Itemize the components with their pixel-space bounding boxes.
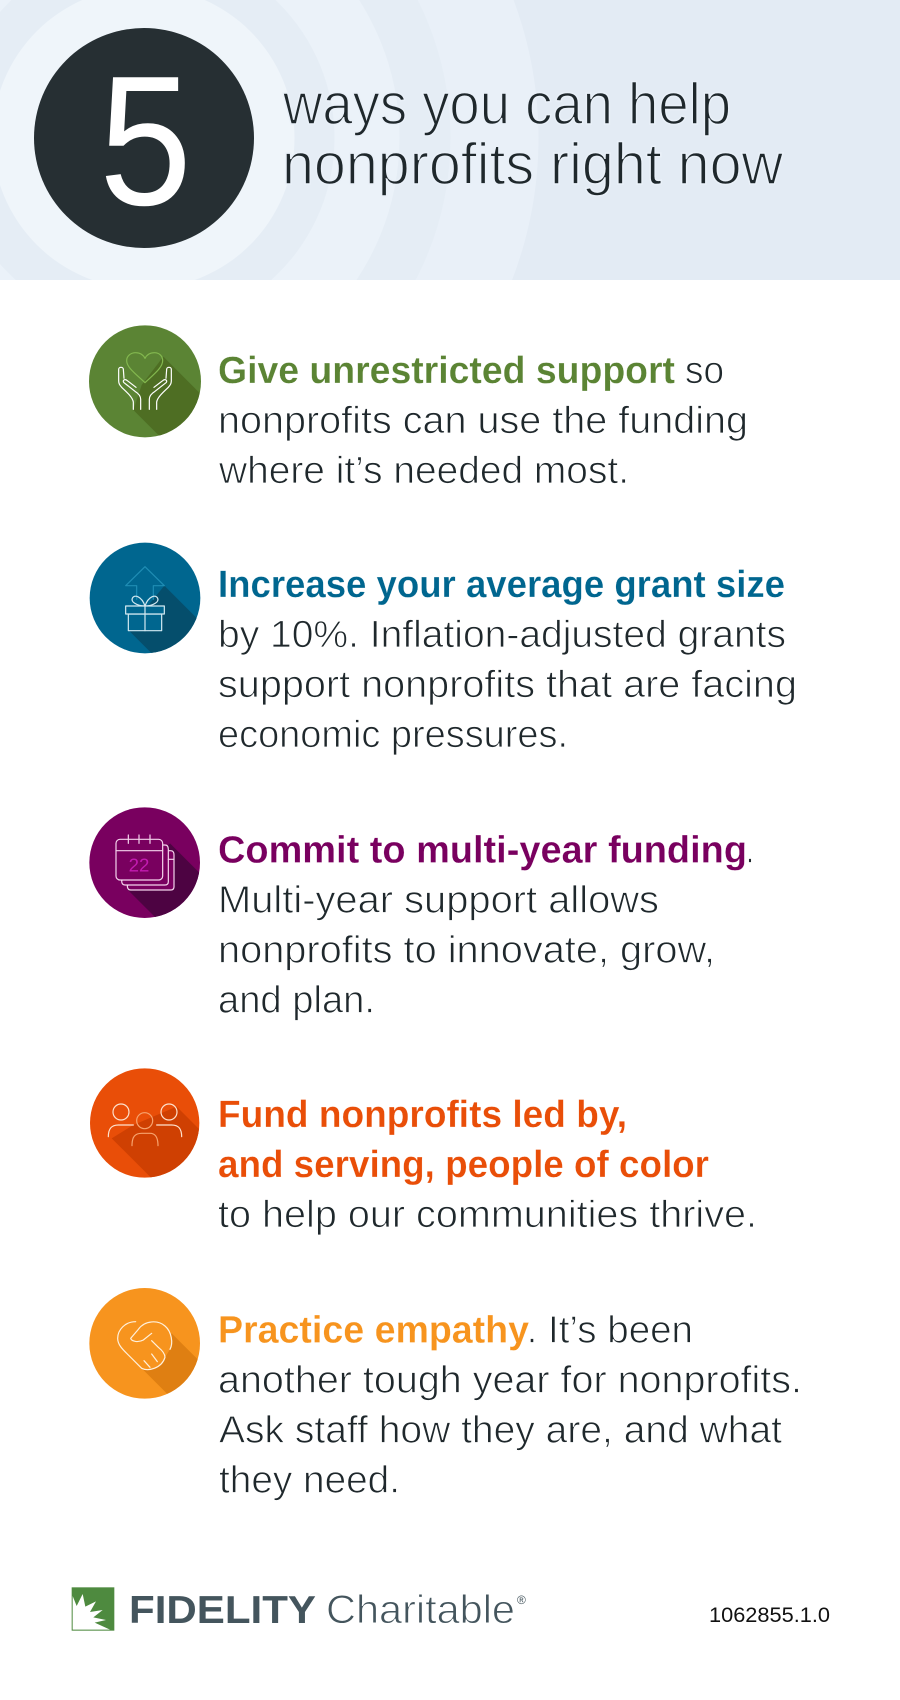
header banner xyxy=(0,0,900,280)
text block 1: Give unrestricted support xyxy=(218,350,675,392)
text block 3: . xyxy=(746,830,754,872)
text block 2: Increase your average grant size xyxy=(218,564,785,606)
text block 4: to help our communities thrive. xyxy=(218,1194,757,1236)
text block 1: nonprofits can use the funding xyxy=(218,400,748,442)
item 2: grant size xyxy=(90,543,797,756)
text block 3: and plan. xyxy=(218,980,375,1022)
logo: Fidelity Charitable xyxy=(72,1587,526,1632)
text block 1: so xyxy=(685,350,724,392)
text block 2 xyxy=(218,564,797,756)
icon: calendar stack xyxy=(89,807,200,918)
reference code: 1062855.1.0 xyxy=(709,1604,830,1627)
title xyxy=(282,72,784,197)
text block 2: support nonprofits that are facing xyxy=(218,664,797,706)
number badge xyxy=(34,28,254,248)
text block 5: Ask staff how they are, and what xyxy=(219,1410,782,1452)
title: ways you can help xyxy=(282,72,731,137)
item 5: practice empathy xyxy=(89,1288,802,1502)
text block 1 xyxy=(218,350,748,492)
icon: calendar stack: 22 xyxy=(129,855,149,876)
item 4: people of color xyxy=(90,1068,757,1236)
logo: Fidelity Charitable: FIDELITY xyxy=(129,1589,316,1632)
text block 5: another tough year for nonprofits. xyxy=(218,1360,802,1402)
text block 4 xyxy=(218,1094,757,1236)
icon: gift with up arrow xyxy=(90,542,200,654)
number badge: 5 xyxy=(99,38,192,244)
text block 1: where it’s needed most. xyxy=(218,450,629,492)
text block 3: Commit to multi-year funding xyxy=(218,830,747,872)
text block 5: . xyxy=(527,1310,537,1352)
title: nonprofits right now xyxy=(282,132,784,197)
text block 2: economic pressures. xyxy=(218,714,568,756)
icon: three people xyxy=(90,1068,200,1178)
text block 4: and serving, people of color xyxy=(218,1144,709,1186)
text block 3: nonprofits to innovate, grow, xyxy=(218,930,715,972)
icon: handshake xyxy=(89,1288,200,1399)
text block 2: by 10%. Inflation-adjusted grants xyxy=(218,614,786,656)
icon: hands holding heart xyxy=(89,325,201,438)
item 3: multi-year funding xyxy=(89,807,754,1022)
text block 5 xyxy=(218,1310,802,1502)
text block 3: Multi-year support allows xyxy=(218,880,659,922)
logo: Fidelity Charitable: ® xyxy=(517,1593,526,1607)
item 1: unrestricted support xyxy=(89,325,748,492)
logo: Fidelity Charitable: Charitable xyxy=(326,1588,515,1632)
text block 4: Fund nonprofits led by, xyxy=(218,1094,627,1136)
text block 5: It’s been xyxy=(548,1310,693,1352)
text block 5: Practice empathy xyxy=(218,1310,529,1352)
text block 3 xyxy=(218,830,754,1022)
text block 5: they need. xyxy=(219,1460,400,1502)
icon: green starburst square xyxy=(72,1587,114,1631)
